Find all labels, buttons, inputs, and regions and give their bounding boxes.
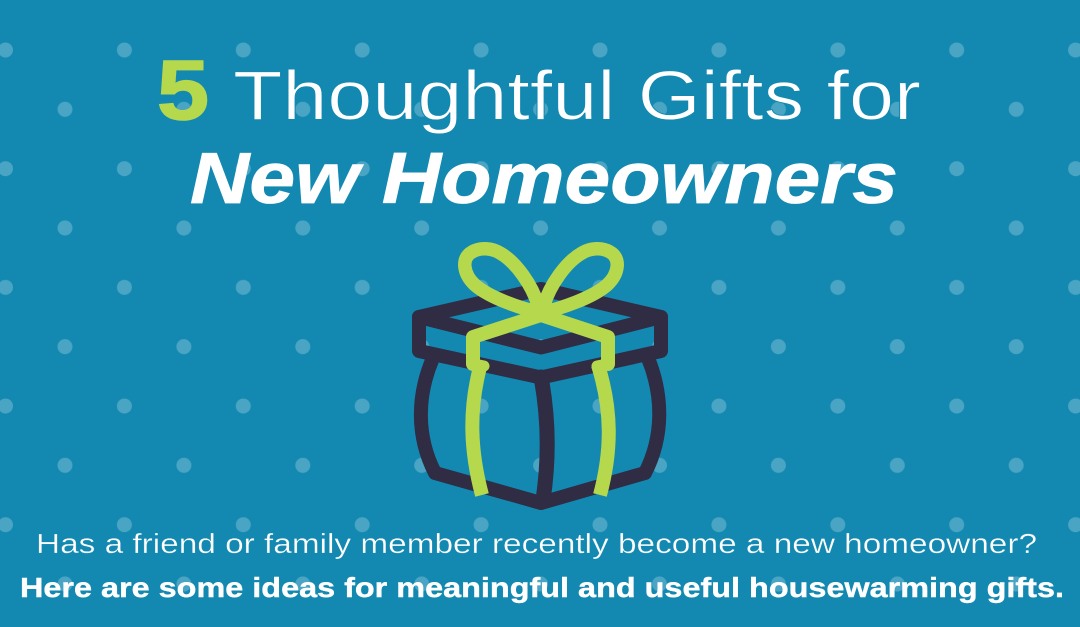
title	[157, 43, 921, 219]
ribbon bow	[465, 249, 617, 313]
box lid	[419, 289, 661, 378]
icon: gift box	[419, 249, 661, 503]
bold line: Here are some ideas for meaningful and useful housewarming gifts.	[20, 572, 1064, 603]
intro text	[20, 528, 1064, 603]
question line: Has a friend or family member recently become a new homeowner?	[36, 528, 1037, 559]
box body	[421, 358, 659, 503]
title line 1: Thoughtful Gifts for	[233, 56, 921, 134]
title line 2: New Homeowners	[190, 139, 898, 219]
ribbon straps	[472, 315, 609, 495]
title number 5: 5	[157, 43, 209, 137]
